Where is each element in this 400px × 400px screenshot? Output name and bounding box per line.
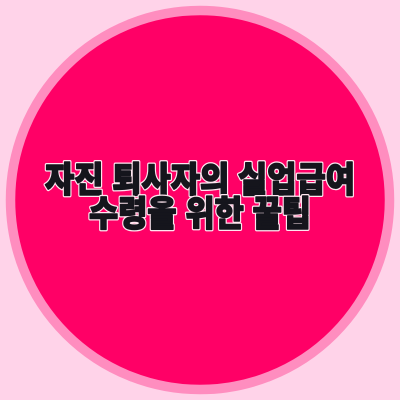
title: 수령을 위한 꿀팁 — [89, 195, 311, 234]
title: 자진 퇴사자의 실업급여 — [45, 161, 355, 200]
title: 자진 퇴사자의 실업급여 — [45, 161, 355, 200]
title: 수령을 위한 꿀팁 — [89, 195, 311, 234]
title — [45, 161, 355, 234]
